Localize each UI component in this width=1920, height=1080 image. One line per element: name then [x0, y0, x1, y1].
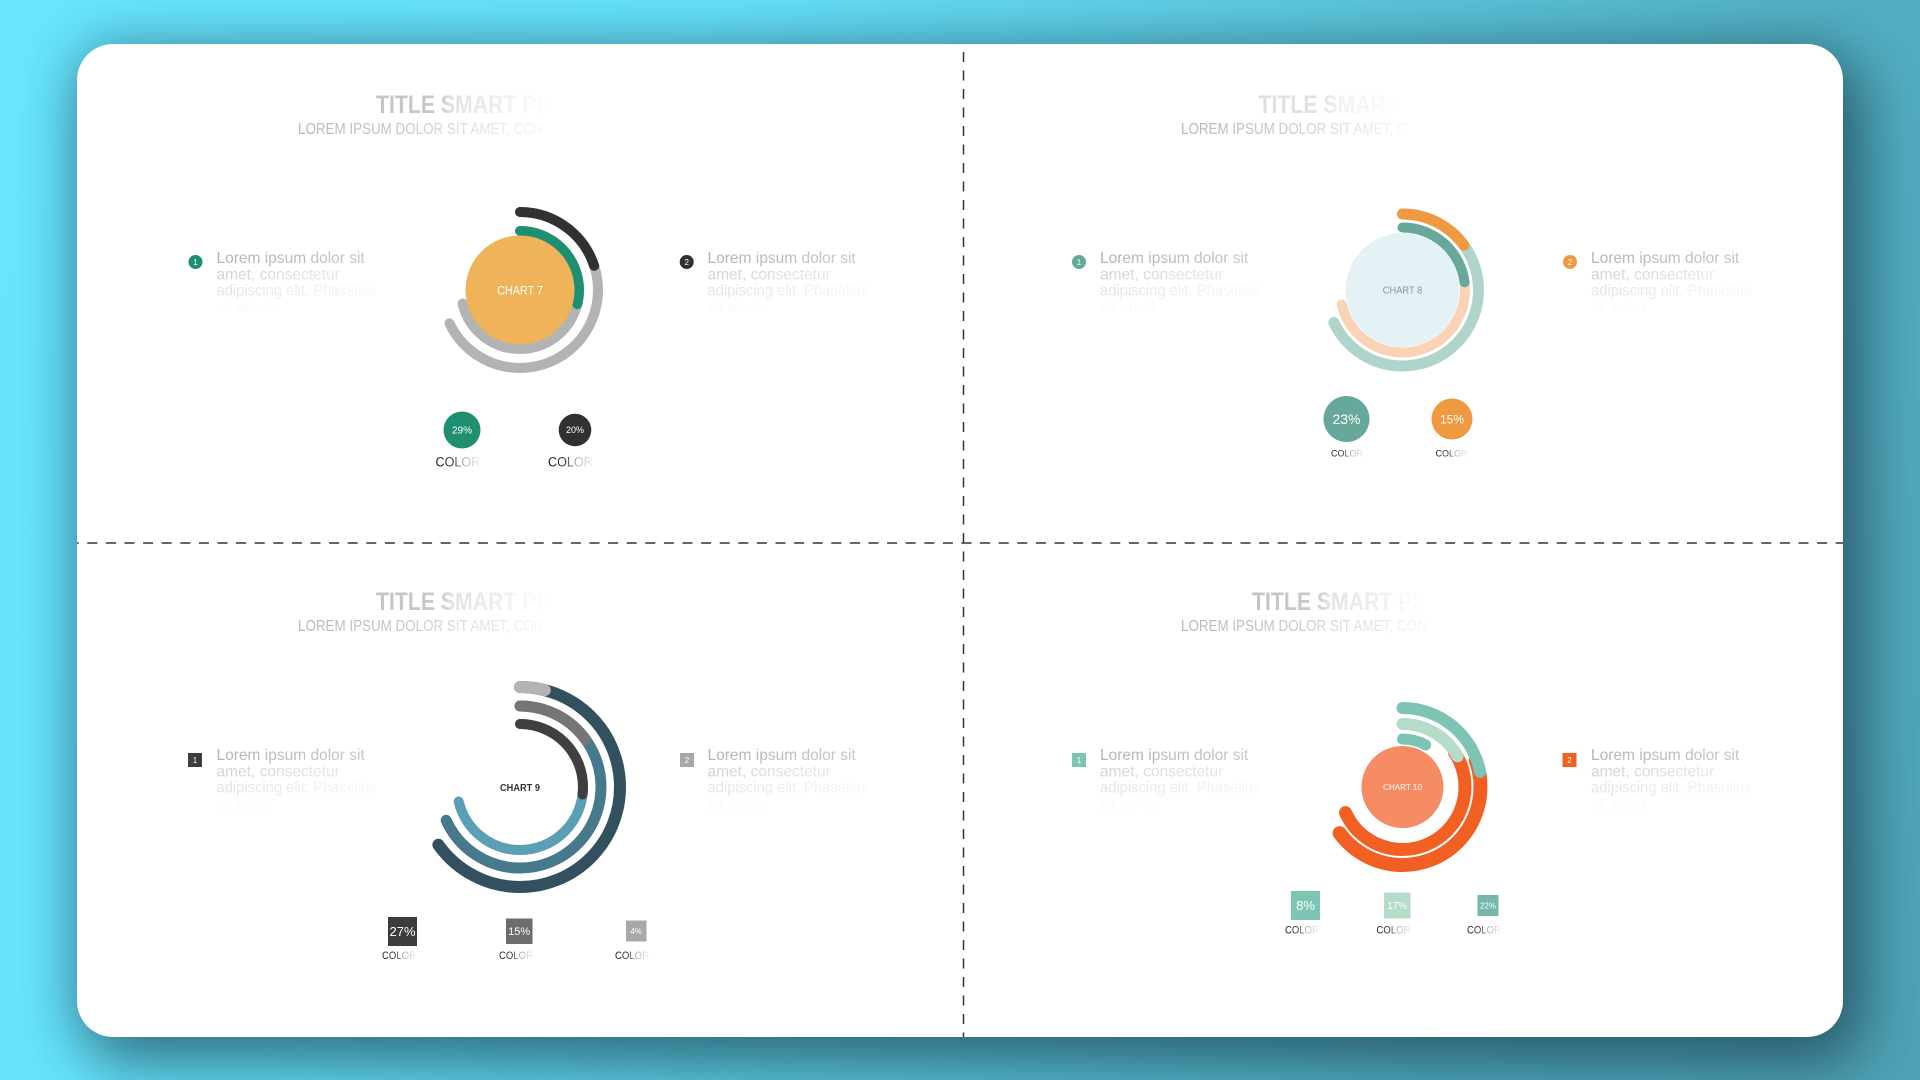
chart: radial chart 8 — [1326, 214, 1478, 366]
legend: teal 22% — [1467, 895, 1501, 937]
text block: right description: sit amet. — [708, 796, 766, 813]
legend: teal 23%: 23% — [1332, 411, 1361, 427]
icon: bullet 1 green: 1 — [193, 258, 198, 267]
icon: bullet 2 orange square: 2 — [1567, 756, 1572, 765]
legend: light grey 4%: 4% — [630, 927, 642, 936]
icon: bullet 1 teal square — [1072, 753, 1086, 767]
text block: left description: Lorem ipsum dolor sit — [1100, 250, 1249, 267]
heading: chart 10 title: TITLE SMART PIE — [1252, 587, 1433, 615]
panel: chart 8 — [1072, 90, 1752, 459]
text block: left description: adipiscing elit. Phasellus — [216, 779, 377, 797]
divider: vertical dashed line — [962, 52, 964, 1037]
text block: left description — [216, 250, 377, 316]
text block: left description — [216, 747, 377, 813]
text block: right description: Lorem ipsum dolor sit — [708, 747, 856, 764]
legend: teal 8%: COLOR — [1285, 925, 1319, 937]
heading: chart 9 title: TITLE SMART PIE — [376, 587, 557, 615]
heading: chart 8 title: TITLE SMART PIE — [1258, 90, 1439, 118]
label: chart 8 centre: CHART 8 — [1383, 285, 1422, 297]
icon: bullet 2 orange — [1563, 255, 1577, 269]
text block: left description — [1100, 250, 1261, 316]
text block: right description: Lorem ipsum dolor sit — [708, 250, 856, 267]
panel: chart 9 — [188, 587, 868, 962]
chart: radial chart 9 — [420, 687, 620, 887]
legend: dark 20%: COLOR — [548, 454, 593, 470]
divider: horizontal dashed line — [77, 542, 1843, 544]
legend: green 29% — [436, 412, 480, 470]
label: chart 9 centre: CHART 9 — [500, 783, 540, 794]
legend: teal 23% — [1324, 396, 1370, 459]
text block: right description: adipiscing elit. Phasellus — [708, 779, 868, 797]
icon: bullet 2 dark: 2 — [684, 258, 689, 267]
text block: right description: sit amet. — [1591, 299, 1650, 316]
legend: dark 27%: 27% — [389, 924, 416, 939]
panel: chart 10 — [1072, 587, 1752, 937]
text block: left description: amet, consectetur — [1100, 266, 1223, 283]
text block: right description: Lorem ipsum dolor sit — [1591, 250, 1740, 267]
legend: light grey 4% — [615, 920, 649, 962]
legend: orange 15%: 15% — [1440, 412, 1464, 426]
legend: orange 15% — [1432, 398, 1472, 459]
legend: dark 20% — [548, 414, 593, 470]
text block: left description: sit amet. — [216, 796, 275, 813]
legend: teal 8% — [1285, 891, 1320, 937]
text block: right description — [1591, 250, 1752, 316]
icon: bullet 1 green — [188, 255, 202, 269]
legend: orange 15%: COLOR — [1436, 449, 1468, 459]
icon: bullet 1 dark square — [188, 753, 202, 767]
icon: bullet 1 teal: 1 — [1077, 258, 1082, 267]
chart: radial chart 10 — [1324, 708, 1482, 866]
icon: bullet 2 orange square — [1562, 753, 1576, 767]
text block: right description — [708, 747, 868, 813]
legend: light green 17%: COLOR — [1376, 925, 1410, 937]
text block: left description: Lorem ipsum dolor sit — [216, 747, 365, 764]
subtitle: chart 8: LOREM IPSUM DOLOR SIT AMET, C — [1181, 121, 1406, 138]
text block: right description: amet, consectetur — [708, 763, 831, 780]
legend: dark 27% — [382, 917, 417, 962]
text block: right description: amet, consectetur — [1591, 763, 1714, 780]
text block: left description: adipiscing elit. Phasellus — [1100, 779, 1261, 797]
legend: green 29%: 29% — [452, 426, 472, 436]
icon: bullet 2 dark — [680, 255, 694, 269]
legend: green 29%: COLOR — [436, 454, 480, 470]
text block: left description: adipiscing elit. Phasellus — [1100, 282, 1261, 300]
text block: right description: adipiscing elit. Phasellus — [708, 282, 868, 300]
legend: grey 15% — [499, 918, 533, 962]
legend: dark 20%: 20% — [566, 425, 584, 435]
legend: teal 22%: COLOR — [1467, 925, 1501, 937]
legend: teal 23%: COLOR — [1331, 449, 1364, 459]
subtitle: chart 10: LOREM IPSUM DOLOR SIT AMET, CON — [1181, 618, 1426, 635]
subtitle: chart 7: LOREM IPSUM DOLOR SIT AMET, CON — [298, 121, 543, 138]
panel: chart 7 — [188, 90, 868, 470]
icon: bullet 2 orange: 2 — [1568, 258, 1573, 267]
text block: right description: adipiscing elit. Phasellus — [1591, 282, 1752, 300]
text block: right description — [1591, 747, 1752, 813]
label: chart 7 centre: CHART 7 — [497, 285, 543, 298]
text block: right description: Lorem ipsum dolor sit — [1591, 747, 1740, 764]
text block: left description: sit amet. — [1100, 299, 1159, 316]
legend: light grey 4%: COLOR — [615, 950, 649, 962]
icon: bullet 1 dark square: 1 — [193, 756, 198, 765]
text block: left description: sit amet. — [1100, 796, 1159, 813]
text block: right description: sit amet. — [708, 299, 766, 316]
icon: bullet 1 teal square: 1 — [1077, 756, 1082, 765]
text block: left description: sit amet. — [216, 299, 275, 316]
legend: light green 17%: 17% — [1387, 901, 1407, 912]
icon: bullet 2 grey square: 2 — [685, 756, 690, 765]
text block: left description — [1100, 747, 1261, 813]
text block: right description: sit amet. — [1591, 796, 1650, 813]
text block: left description: amet, consectetur — [1100, 763, 1223, 780]
text block: right description: adipiscing elit. Phasellus — [1591, 779, 1752, 797]
text block: right description: amet, consectetur — [708, 266, 831, 283]
text block: left description: amet, consectetur — [216, 266, 340, 283]
text block: right description: amet, consectetur — [1591, 266, 1714, 283]
text block: left description: Lorem ipsum dolor sit — [216, 250, 365, 267]
chart: radial chart 7 — [442, 212, 598, 368]
heading: chart 7 title: TITLE SMART PIE — [376, 90, 557, 118]
subtitle: chart 9: LOREM IPSUM DOLOR SIT AMET, CON — [298, 618, 543, 635]
text block: left description: Lorem ipsum dolor sit — [1100, 747, 1249, 764]
text block: left description: adipiscing elit. Phasellus — [216, 282, 377, 300]
legend: teal 22%: 22% — [1480, 902, 1496, 910]
legend: grey 15%: 15% — [508, 926, 530, 938]
icon: bullet 1 teal — [1072, 255, 1086, 269]
text block: right description — [708, 250, 868, 316]
icon: bullet 2 grey square — [680, 753, 694, 767]
legend: dark 27%: COLOR — [382, 950, 416, 962]
label: chart 10 centre: CHART 10 — [1383, 782, 1422, 792]
legend: teal 8%: 8% — [1296, 898, 1315, 913]
legend: light green 17% — [1376, 892, 1410, 937]
legend: grey 15%: COLOR — [499, 950, 533, 962]
text block: left description: amet, consectetur — [216, 763, 340, 780]
